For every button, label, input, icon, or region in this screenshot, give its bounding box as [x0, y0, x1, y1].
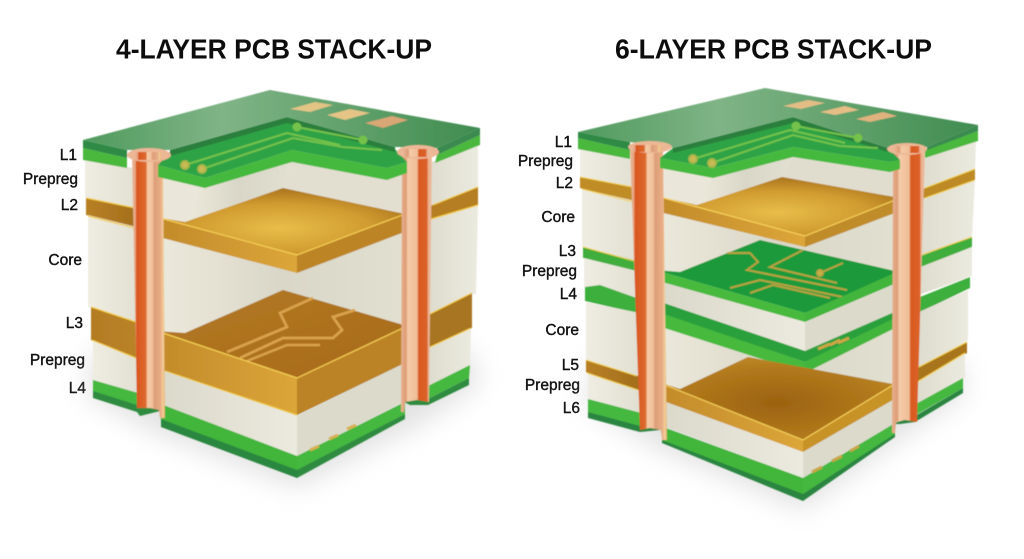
L3 copper block with traces — [155, 290, 407, 415]
L2 copper plane — [655, 177, 900, 247]
4-layer PCB cube — [83, 90, 480, 478]
label prepreg: Prepreg — [522, 263, 577, 280]
via left — [630, 148, 667, 440]
via right — [401, 152, 432, 412]
via left — [132, 155, 165, 418]
via caps — [628, 141, 927, 155]
label L3: L3 — [559, 243, 576, 260]
label core: Core — [48, 252, 82, 269]
bottom pads — [812, 446, 859, 472]
label L1: L1 — [60, 147, 77, 164]
bottom pads — [310, 425, 356, 450]
label L4: L4 — [560, 286, 577, 303]
label core: Core — [545, 322, 579, 339]
label prepreg: Prepreg — [23, 171, 78, 188]
notch walls — [155, 158, 407, 335]
6-layer PCB cube — [578, 88, 978, 501]
layer labels: 4-layer — [23, 147, 86, 397]
label prepreg: Prepreg — [30, 352, 85, 369]
shelf traces — [181, 124, 382, 173]
via right — [892, 150, 925, 433]
via caps — [127, 145, 439, 162]
label L3: L3 — [66, 315, 83, 332]
label prepreg: Prepreg — [518, 153, 573, 170]
title: 4-layer: 4-LAYER PCB STACK-UP — [116, 34, 432, 64]
L5 copper plane — [655, 357, 898, 452]
L2 copper plane — [155, 188, 407, 273]
top gold pads — [783, 100, 897, 122]
title: 6-layer: 6-LAYER PCB STACK-UP — [615, 34, 932, 64]
drop shadow: 4-layer — [85, 350, 480, 488]
label L4: L4 — [69, 380, 86, 397]
prepreg under L3 — [655, 280, 899, 351]
right outer stack — [400, 146, 478, 405]
label core: Core — [541, 209, 575, 226]
L1 top board — [83, 90, 480, 188]
left outer stack — [580, 149, 660, 432]
layer labels: 6-layer — [518, 134, 580, 417]
L4 board with pads — [655, 300, 899, 373]
shelf traces — [689, 122, 878, 167]
label L1: L1 — [555, 134, 572, 151]
drop shadow: 6-layer — [585, 360, 965, 510]
bottom prepreg and L6 board — [655, 397, 898, 501]
label L6: L6 — [563, 400, 580, 417]
label prepreg: Prepreg — [525, 377, 580, 394]
label L2: L2 — [61, 197, 78, 214]
left outer stack — [85, 160, 160, 416]
right outer stack — [892, 141, 976, 424]
L1 top board — [578, 88, 978, 178]
bottom prepreg and L4 board — [155, 362, 407, 478]
notch walls — [655, 155, 900, 392]
label L2: L2 — [556, 175, 573, 192]
top gold pads — [290, 102, 408, 128]
L3 board with traces — [655, 240, 899, 322]
label L5: L5 — [562, 357, 579, 374]
